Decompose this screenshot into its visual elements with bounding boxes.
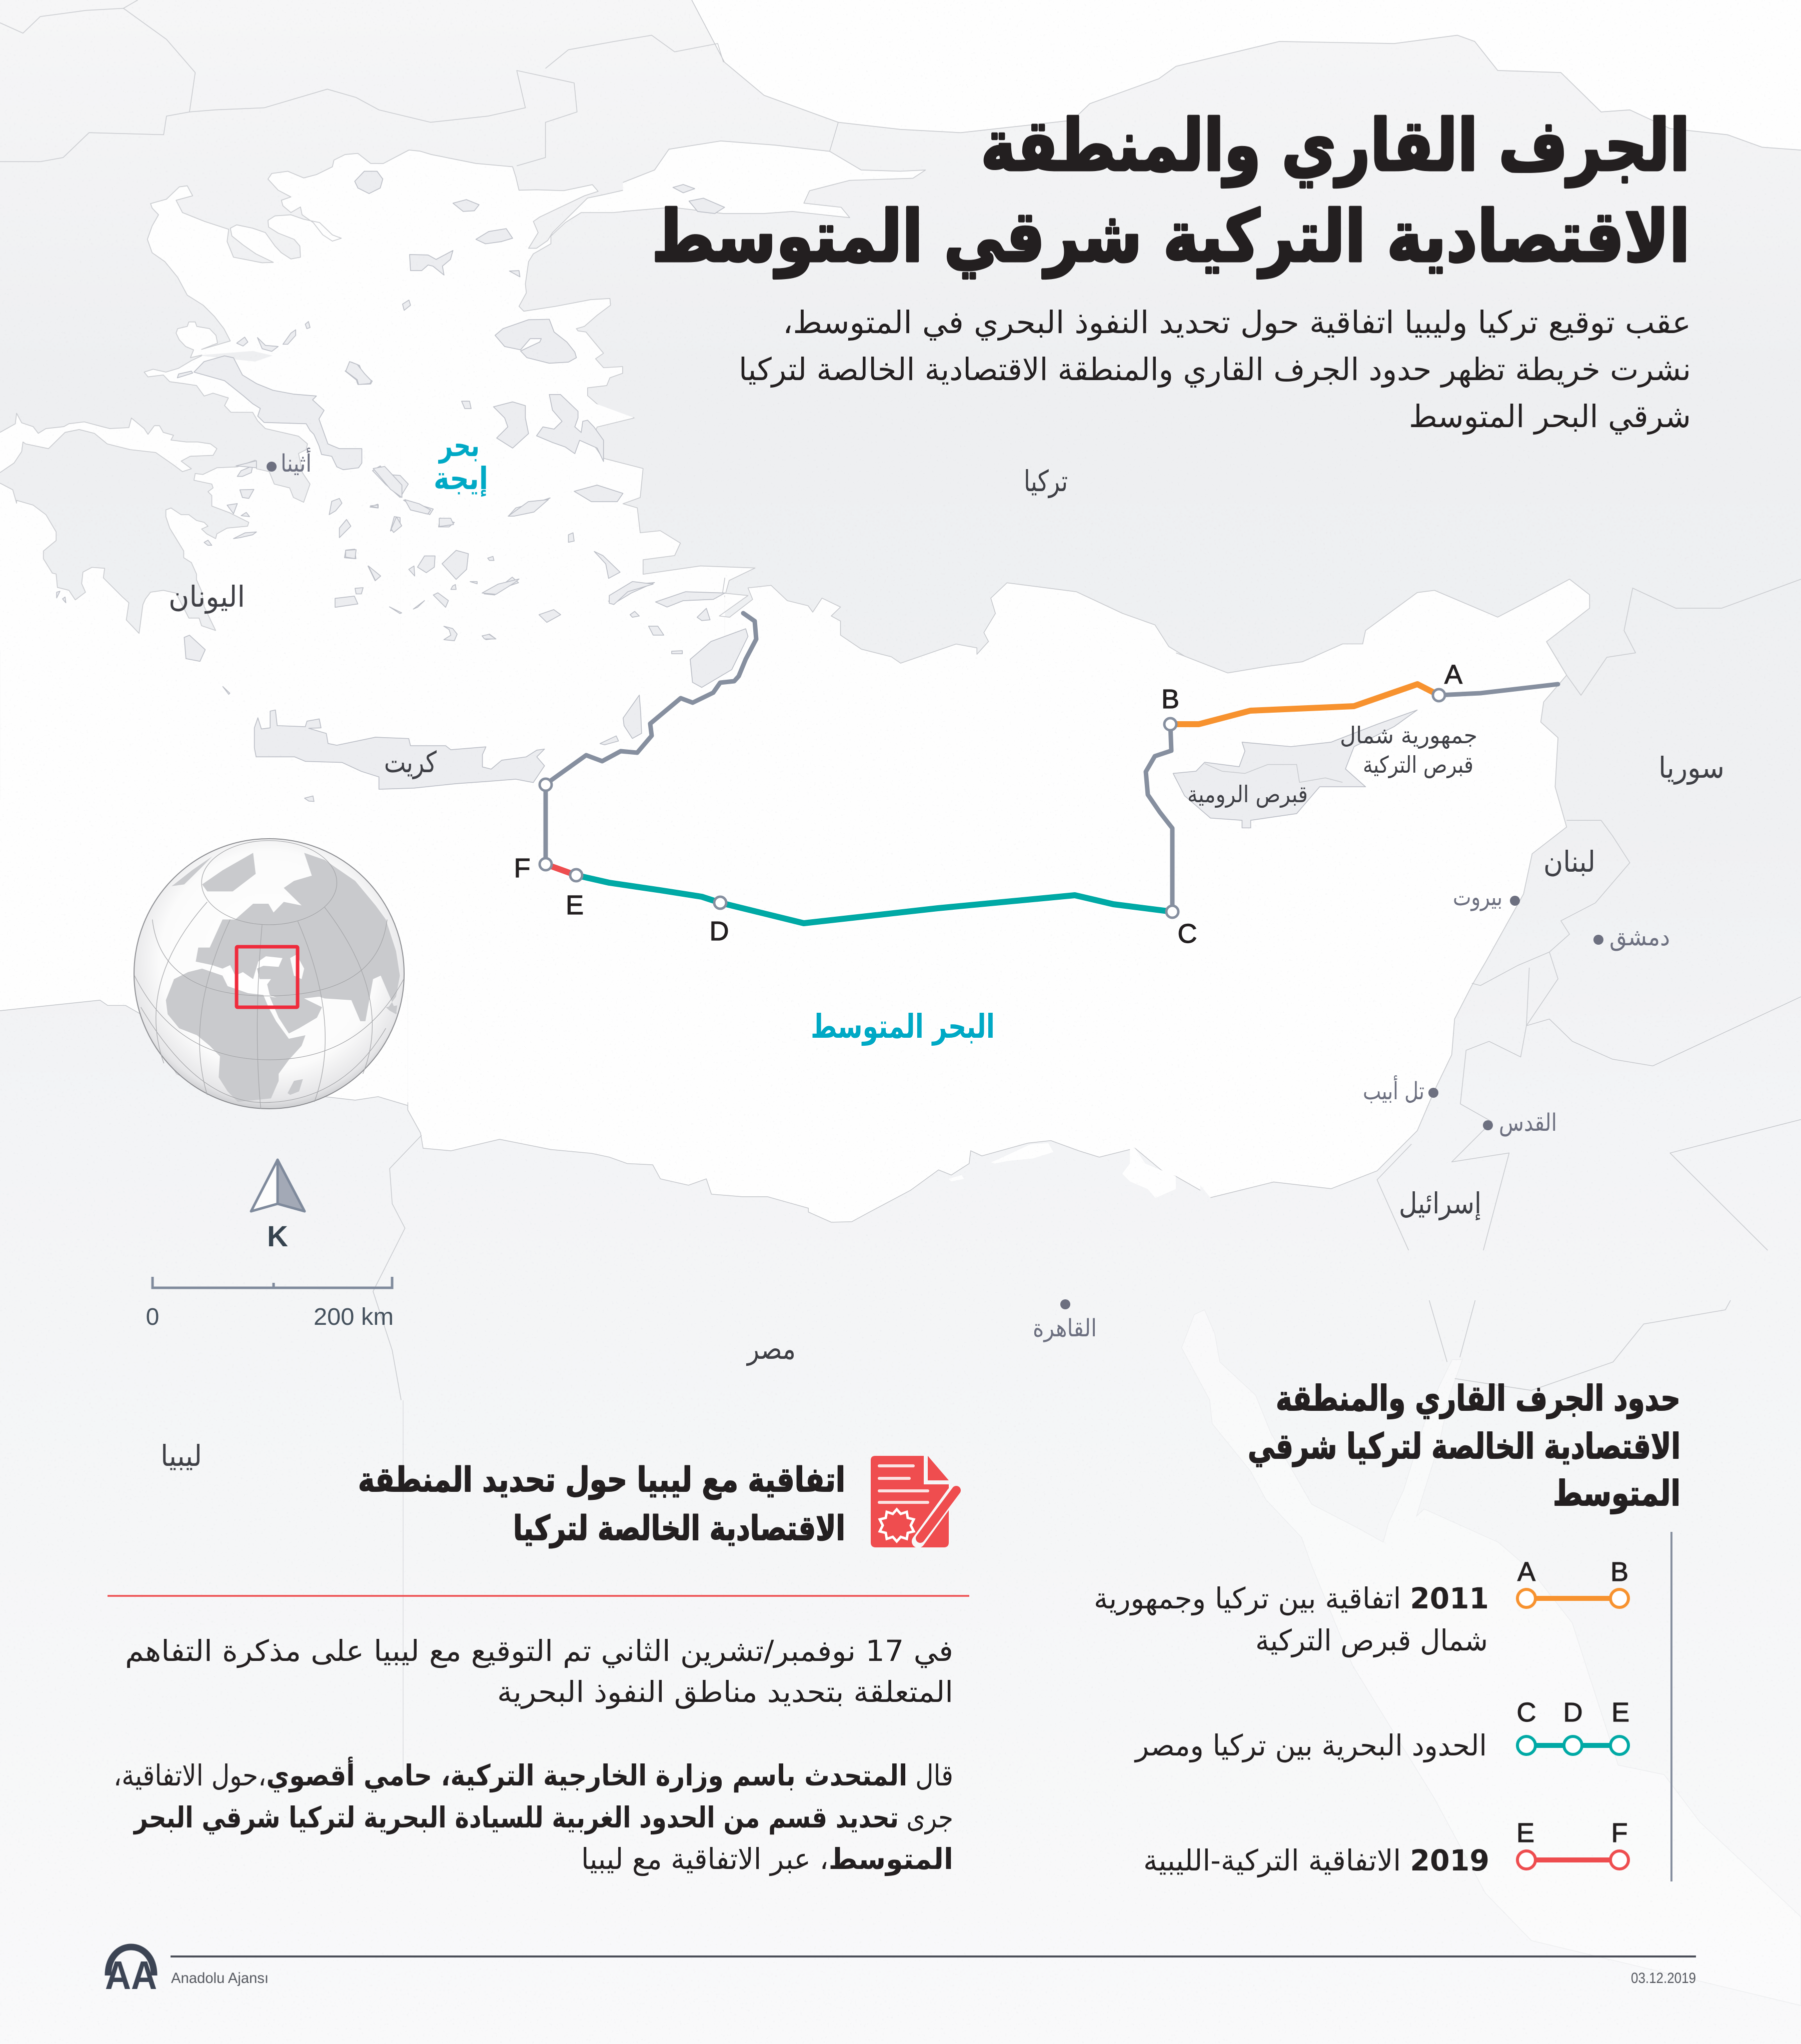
map: islands and peninsulas <box>57 171 1417 828</box>
scale bar: 0 <box>146 1304 159 1330</box>
map labels: دمشق <box>1609 923 1670 951</box>
map labels: بيروت <box>1453 883 1502 911</box>
node: C <box>1166 906 1178 918</box>
scale bar: 200 km <box>314 1304 394 1330</box>
subtitle: شرقي البحر المتوسط <box>1409 398 1691 435</box>
point labels A to F <box>514 660 1462 949</box>
legend heading <box>1248 1378 1680 1514</box>
title <box>652 105 1690 279</box>
sea: north Aegean <box>148 150 634 463</box>
point labels A to F: A <box>1444 660 1462 690</box>
paragraph: signing <box>125 1634 953 1709</box>
legend row: Turkey-Egypt: E <box>1611 1697 1629 1727</box>
subtitle <box>739 304 1691 435</box>
node: F upper <box>540 779 552 791</box>
node: A <box>1433 689 1445 701</box>
eastern Aegean islands <box>370 185 725 603</box>
legend rule <box>1670 1532 1672 1881</box>
agreement heading <box>358 1460 845 1548</box>
locator globe <box>134 839 404 1109</box>
city dots <box>267 462 1603 1309</box>
agreement heading: اتفاقية مع ليبيا حول تحديد المنطقة <box>358 1460 845 1500</box>
legend row: 2019: E <box>1516 1818 1534 1848</box>
north arrow <box>251 1160 305 1253</box>
map labels: ليبيا <box>161 1439 202 1473</box>
map labels: سوريا <box>1658 751 1724 785</box>
map labels: القاهرة <box>1033 1314 1097 1342</box>
north arrow: K <box>267 1220 288 1253</box>
globe continents and graticule <box>135 841 404 1109</box>
map labels: جمهورية شمال <box>1340 722 1477 749</box>
legend heading: المتوسط <box>1553 1473 1680 1514</box>
paragraph: signing: المتعلقة بتحديد مناطق النفوذ البحرية <box>497 1675 953 1709</box>
Red Sea and gulfs <box>1181 1310 1801 2005</box>
sea: Black Sea <box>692 0 1801 150</box>
legend row: 2019: 2019 الاتفاقية التركية-الليبية <box>1143 1843 1489 1878</box>
sea: eastern Mediterranean, Levant coast <box>900 579 1589 1198</box>
boundary: red E-F <box>546 864 576 875</box>
point labels A to F: D <box>709 916 729 946</box>
paragraph: signing: في 17 نوفمبر/تشرين الثاني تم التوقيع مع ليبيا على مذكرة التفاهم <box>125 1634 953 1668</box>
map labels: البحر المتوسط <box>811 1007 995 1046</box>
legend row: Turkey-Egypt: D <box>1563 1697 1582 1727</box>
legend row: 2019: F <box>1611 1818 1627 1848</box>
globe body <box>134 839 404 1109</box>
map labels: إيجة <box>434 460 488 497</box>
sea: Egyptian coast <box>408 990 1200 1222</box>
map labels: تل أبيب <box>1363 1075 1424 1105</box>
boundary: Cyprus west grey line <box>1146 724 1172 912</box>
map labels: أثينا <box>281 448 312 478</box>
Euboea and Saronic islands <box>57 356 408 603</box>
node: B <box>1164 718 1176 730</box>
northern Aegean islands <box>237 171 604 462</box>
point labels A to F: E <box>566 890 584 920</box>
sea: Libyan coast <box>0 800 408 1105</box>
legend row: 2011: 2011 اتفاقية بين تركيا وجمهورية <box>1094 1581 1489 1616</box>
footer rule <box>171 1955 1696 1957</box>
boundary: Aegean grey line <box>546 613 756 864</box>
subtitle: عقب توقيع تركيا وليبيا اتفاقية حول تحديد النفوذ البحري في المتوسط، <box>783 304 1691 341</box>
agreement heading: الاقتصادية الخالصة لتركيا <box>513 1509 845 1548</box>
sea: south Aegean and Ionian, around Peloponnese and Attica <box>0 312 400 650</box>
legend row: 2019 <box>1143 1818 1628 1878</box>
legend row: 2011: B <box>1610 1557 1628 1587</box>
maritime boundaries <box>540 613 1558 923</box>
map labels: تركيا <box>1024 464 1068 499</box>
map labels: قبرص الرومية <box>1187 781 1308 808</box>
boundary: teal C-D-E <box>576 875 1172 923</box>
sea: east Aegean and Marmara <box>400 141 926 663</box>
node: F <box>540 858 552 870</box>
boundary: orange A-B <box>1170 684 1439 724</box>
map labels: بحر <box>438 427 480 464</box>
Crete <box>255 710 545 789</box>
Dodecanese islands <box>482 579 748 745</box>
paragraph: spokesman: قال المتحدث باسم وزارة الخارجية التركية، حامي أقصوي،حول الاتفاقية، <box>114 1756 953 1793</box>
map labels: مصر <box>746 1332 796 1366</box>
boundary: east grey line <box>1439 684 1558 695</box>
date: 03.12.2019 <box>1631 1970 1696 1986</box>
legend heading: حدود الجرف القاري والمنطقة <box>1276 1378 1680 1419</box>
legend row: 2011: A <box>1517 1557 1535 1587</box>
map labels: كريت <box>384 745 437 780</box>
Cyclades, Kythira and Crete <box>184 498 550 802</box>
legend heading: الاقتصادية الخالصة لتركيا شرقي <box>1248 1426 1680 1467</box>
locator red rectangle <box>237 947 298 1007</box>
map labels: لبنان <box>1543 845 1595 879</box>
sea: central Mediterranean, Turkish south-west coast <box>0 578 1200 995</box>
node: E <box>570 869 582 881</box>
paragraph: spokesman: المتوسط، عبر الاتفاقية مع ليبيا <box>581 1842 953 1876</box>
map labels: قبرص التركية <box>1363 751 1473 779</box>
point labels A to F: C <box>1177 919 1197 949</box>
point labels A to F: F <box>514 853 530 883</box>
agency name: Anadolu Ajansı <box>171 1970 269 1986</box>
point labels A to F: B <box>1161 684 1179 714</box>
legend row: Turkey-Egypt: الحدود البحرية بين تركيا ومصر <box>1134 1728 1487 1763</box>
legend row: Turkey-Egypt <box>1134 1697 1629 1763</box>
red divider <box>108 1595 969 1597</box>
node: D <box>714 897 726 909</box>
legend row: Turkey-Egypt: C <box>1516 1697 1536 1727</box>
paragraph: spokesman: جرى تحديد قسم من الحدود الغربية للسيادة البحرية لتركيا شرقي البحر <box>133 1800 953 1835</box>
logo: Anadolu Agency: AA <box>105 1953 157 1997</box>
subtitle: نشرت خريطة تظهر حدود الجرف القاري والمنطقة الاقتصادية الخالصة لتركيا <box>739 351 1691 388</box>
scale bar <box>146 1277 394 1330</box>
paragraph: spokesman <box>114 1756 953 1876</box>
map labels <box>161 427 1724 1473</box>
legend row: 2011 <box>1094 1557 1628 1658</box>
Cyprus <box>1173 710 1417 828</box>
map labels: اليونان <box>169 580 245 614</box>
map labels: إسرائيل <box>1399 1186 1481 1221</box>
icon: agreement document <box>871 1456 956 1547</box>
legend row: 2011: شمال قبرص التركية <box>1255 1623 1488 1658</box>
map labels: القدس <box>1499 1109 1557 1137</box>
